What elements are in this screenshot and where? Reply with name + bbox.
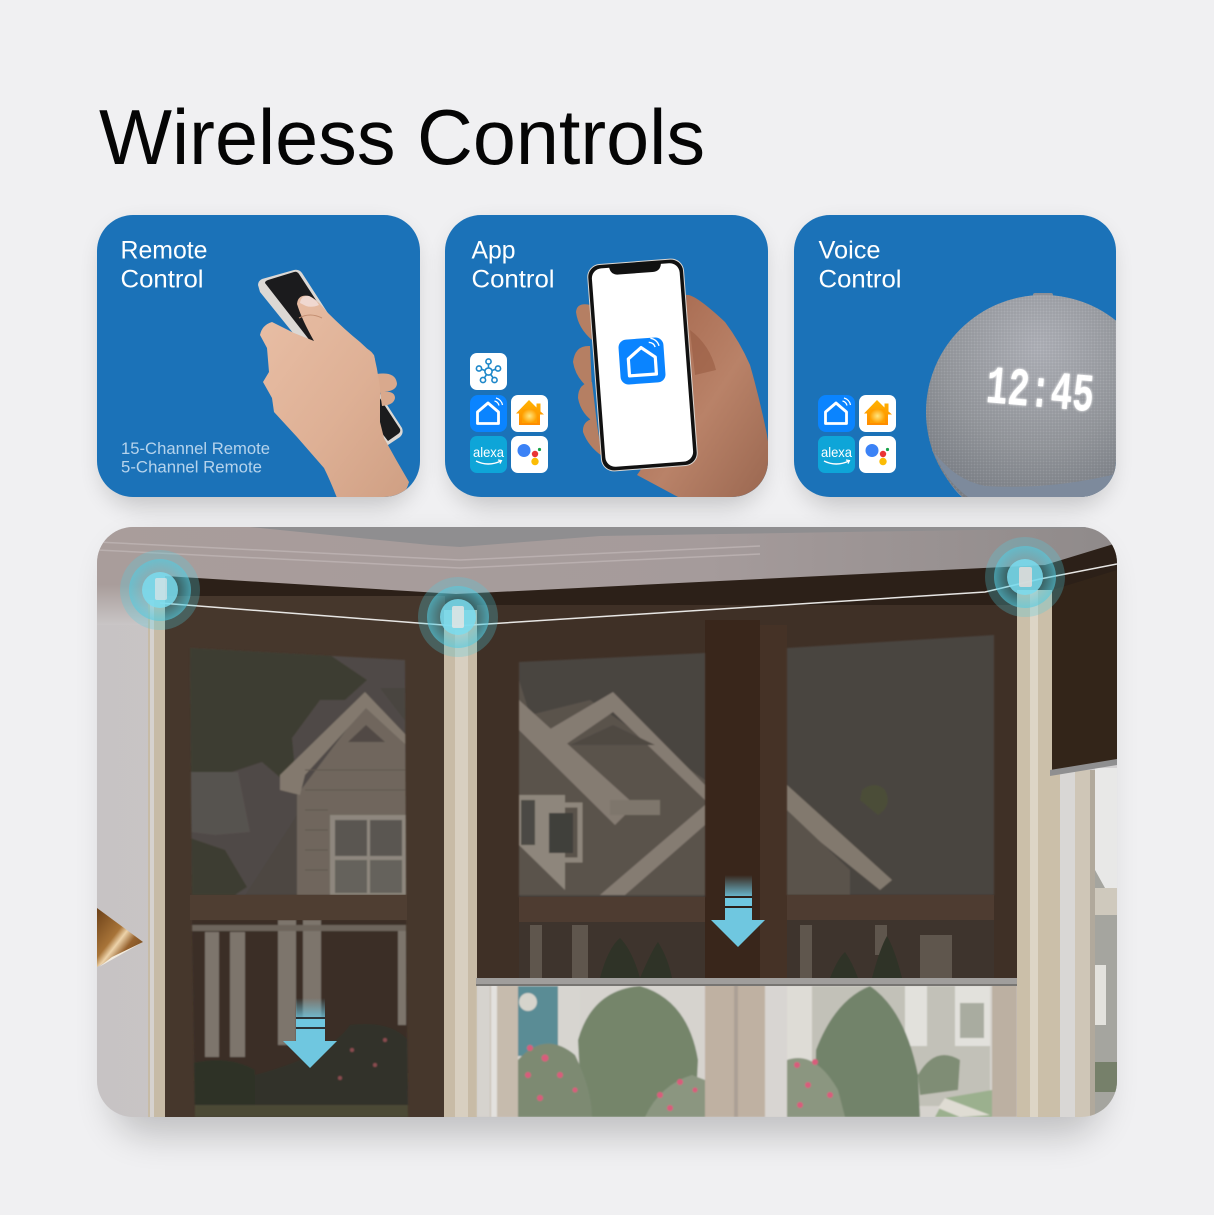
- center window rails and lower band: [519, 897, 705, 922]
- title: Wireless Controls: [99, 93, 705, 181]
- text: clock display: 12:45: [984, 358, 1096, 428]
- panel: window shades photo: [97, 527, 1117, 1135]
- wireless motor signal: right: [985, 537, 1065, 617]
- panel: app control: [445, 215, 769, 506]
- illustration: hand holding remote: [258, 270, 409, 498]
- left window lower pane: [190, 920, 410, 1120]
- right column: [1017, 590, 1060, 1117]
- panel: remote control: [97, 215, 420, 506]
- center window right pane: [785, 630, 997, 900]
- icon: apple home: [859, 395, 896, 432]
- heading: remote control: Control: [120, 266, 204, 294]
- center shade bottom bar: [476, 978, 1017, 984]
- icon: apple home: [511, 395, 548, 432]
- icon: alexa: [470, 436, 507, 473]
- icon: google assistant: [859, 436, 896, 473]
- icon: alexa: alexa: [821, 444, 852, 460]
- center window left pane: [519, 650, 706, 900]
- left window upper pane: [190, 640, 406, 896]
- heading: voice control: Voice: [818, 236, 880, 264]
- white cable lines: [160, 564, 1117, 626]
- outdoor view below shade: [477, 984, 1017, 1117]
- crown molding: [97, 527, 1117, 599]
- icon: alexa: alexa: [473, 444, 504, 460]
- illustration: hand holding phone: [573, 258, 769, 497]
- left window shade: [165, 596, 445, 1117]
- right shade: [1052, 570, 1117, 770]
- right window outdoor view: [1095, 768, 1117, 888]
- text: remote channel options: 5-Channel Remote: [121, 458, 262, 476]
- icon: google assistant: [511, 436, 548, 473]
- illustration: smart speaker with clock: [926, 293, 1116, 497]
- arrow: center shade lowering: [711, 875, 765, 947]
- panel: voice control: [790, 215, 1120, 516]
- left window middle rail: [190, 895, 407, 920]
- center column: [444, 610, 477, 1117]
- heading: remote control: Remote: [120, 236, 208, 264]
- heading: app control: App: [472, 236, 516, 264]
- icon: smart life app: [470, 395, 507, 432]
- center window shade: [477, 605, 1017, 980]
- heading: voice control: Control: [818, 266, 902, 294]
- wireless motor signal: left: [120, 550, 200, 630]
- left trim: [148, 600, 166, 1117]
- icon: alexa: [818, 436, 855, 473]
- icon: smart life app: [818, 395, 855, 432]
- icon: app logo on phone: [618, 337, 666, 385]
- arrow: left shade lowering: [283, 998, 337, 1068]
- wall: [97, 527, 1117, 1117]
- heading: app control: Control: [472, 266, 554, 294]
- lamp shade: [97, 908, 143, 967]
- text: remote channel options: 15-Channel Remote: [121, 440, 270, 458]
- valance: [165, 544, 1117, 610]
- wireless motor signal: center: [418, 577, 498, 657]
- infographic canvas: [93, 108, 1120, 1152]
- icon: smart hub: [470, 353, 507, 390]
